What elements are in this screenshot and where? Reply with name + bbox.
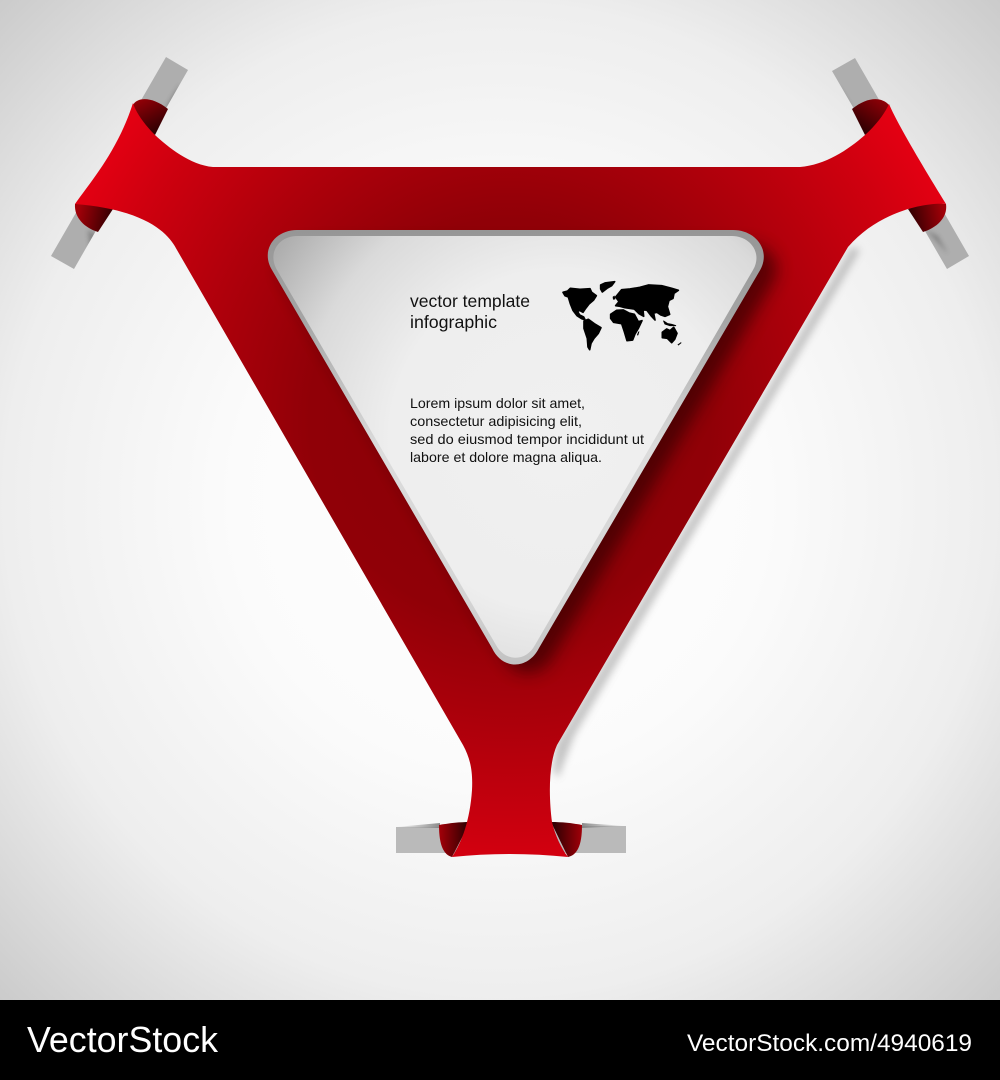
footer logo: VectorStock	[27, 1019, 219, 1060]
bottom strip shadow wedges	[396, 823, 626, 828]
strip: top right	[832, 58, 969, 269]
heading: infographic	[410, 312, 497, 332]
curl: bottom right	[551, 822, 582, 857]
strip: top left	[51, 57, 188, 269]
strip: bottom	[396, 826, 626, 853]
window shadow on ribbon	[281, 244, 777, 673]
ribbon outer shadow	[553, 247, 860, 778]
curl: top right	[852, 99, 889, 135]
panel surface	[273, 236, 756, 658]
triangle panel	[268, 230, 764, 664]
red ribbon triangle	[75, 103, 946, 857]
body text: Lorem ipsum dolor sit amet,	[410, 395, 585, 411]
strip shadows	[88, 84, 948, 254]
footer bar	[0, 1000, 1000, 1080]
icon: world map	[563, 282, 681, 350]
body text: sed do eiusmod tempor incididunt ut	[410, 431, 644, 447]
gray strips behind ribbon	[51, 57, 969, 853]
heading: vector template	[410, 291, 530, 311]
curl: top left	[133, 99, 168, 135]
curl: bottom left	[439, 822, 470, 857]
body text: consectetur adipisicing elit,	[410, 413, 582, 429]
footer image id: VectorStock.com/4940619	[687, 1030, 972, 1057]
curl: right	[908, 203, 946, 232]
curl: left	[75, 203, 113, 232]
body text: labore et dolore magna aliqua.	[410, 449, 602, 465]
panel frame	[268, 230, 764, 664]
